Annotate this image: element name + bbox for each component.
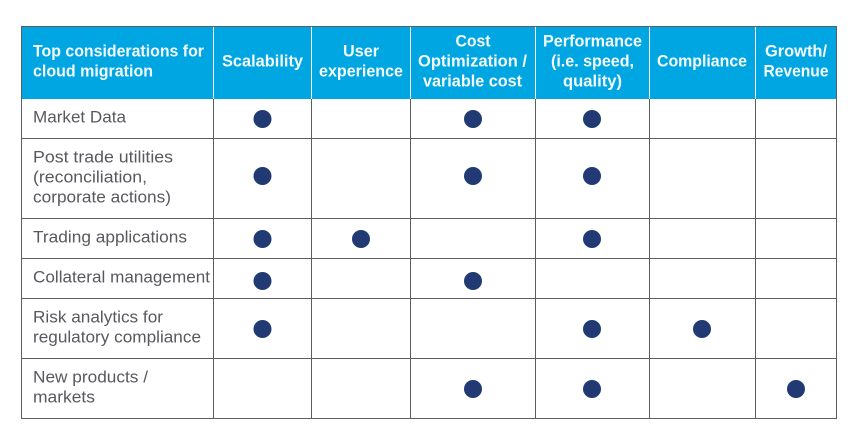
row: post trade utilities: corporate actions) — [33, 188, 171, 206]
row: collateral management: Collateral management — [33, 268, 210, 286]
header: cost optimization: variable cost — [423, 72, 522, 90]
row: new products / markets: markets — [33, 388, 95, 406]
header: top considerations — [33, 42, 205, 80]
header: growth / revenue: Revenue — [764, 62, 828, 80]
row: new products / markets: New products / — [33, 368, 148, 386]
row: market data — [33, 108, 601, 128]
row: risk analytics: Risk analytics for — [33, 308, 164, 326]
header: performance: (i.e. speed, — [551, 52, 634, 70]
row: collateral management — [33, 268, 482, 290]
row: new products / markets — [33, 368, 805, 406]
row: risk analytics — [33, 308, 711, 346]
header: user experience: experience — [319, 62, 403, 80]
header: compliance: Compliance — [657, 52, 747, 70]
row: trading applications — [33, 228, 601, 248]
header: growth / revenue: Growth/ — [765, 42, 827, 60]
header: performance: Performance — [543, 32, 642, 50]
header: performance — [543, 32, 642, 90]
header: cost optimization: Cost — [456, 32, 491, 50]
header: growth / revenue — [764, 42, 828, 80]
row: post trade utilities: (reconciliation, — [33, 168, 147, 186]
header: cost optimization — [418, 32, 527, 90]
header: top considerations: Top considerations for — [33, 42, 205, 60]
row: market data: Market Data — [33, 108, 127, 126]
header: performance: quality) — [563, 72, 622, 90]
header: top considerations: cloud migration — [33, 62, 153, 80]
header: cost optimization: Optimization / — [418, 52, 527, 70]
header: user experience — [319, 42, 403, 80]
row: risk analytics: regulatory compliance — [33, 328, 201, 346]
header row — [22, 26, 836, 99]
header: scalability: Scalability — [222, 52, 304, 70]
row: trading applications: Trading applications — [33, 228, 187, 246]
row: post trade utilities: Post trade utilities — [33, 148, 173, 166]
header background — [22, 26, 836, 99]
header: user experience: User — [343, 42, 380, 60]
row: post trade utilities — [33, 148, 601, 206]
